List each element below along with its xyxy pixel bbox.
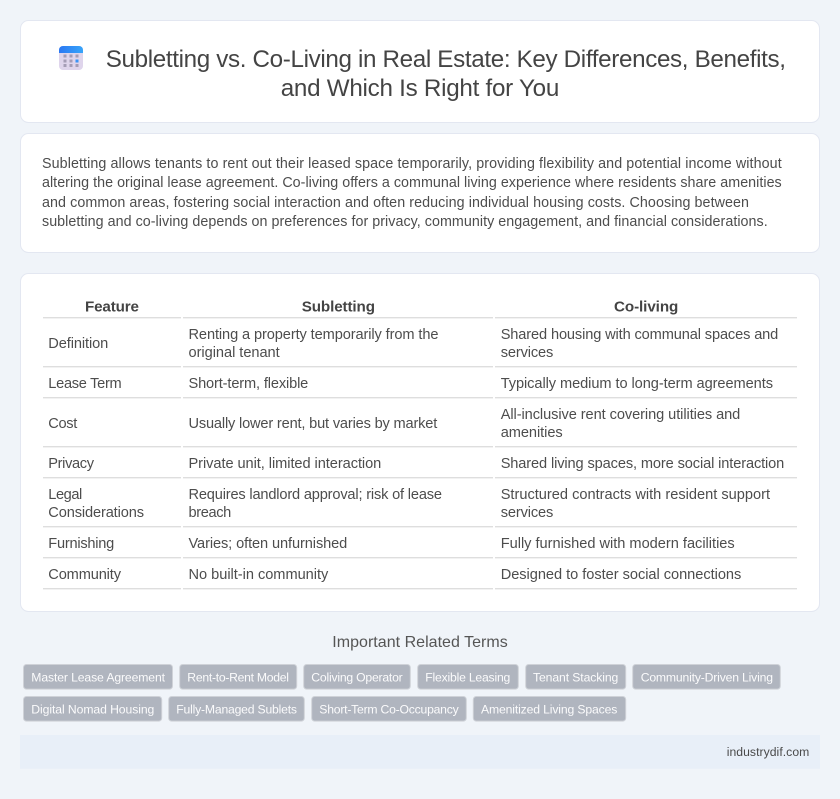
tag (169, 696, 304, 721)
row: cost: All-inclusive rent covering utilities and (501, 407, 740, 423)
row: community: No built-in community (188, 567, 329, 583)
row: legal considerations (48, 487, 770, 521)
row: lease term: Typically medium to long-term agreements (501, 376, 773, 392)
row: lease term: Short-term, flexible (188, 376, 308, 392)
row: definition: original tenant (188, 345, 280, 361)
row: privacy: Privacy (48, 456, 95, 472)
row: legal considerations: Structured contracts with resident support (501, 487, 770, 503)
title (106, 46, 786, 102)
row: privacy (48, 456, 784, 472)
tag: Tenant Stacking (533, 670, 618, 684)
row: definition: Definition (48, 336, 108, 352)
panel: description (20, 134, 820, 252)
row: community: Designed to foster social connections (501, 567, 741, 583)
row: community: Community (48, 567, 122, 583)
row: legal considerations: Considerations (48, 505, 144, 521)
row: cost: Cost (48, 416, 77, 432)
footer (20, 735, 820, 769)
row: furnishing: Fully furnished with modern facilities (501, 536, 735, 552)
tag (304, 664, 410, 689)
row: community (48, 567, 741, 583)
row: furnishing (48, 536, 735, 552)
text block: description: Subletting allows tenants to rent out their leased space temporarily, providing flexibility and potential income without (42, 156, 782, 172)
heading: related terms: Important Related Terms (332, 634, 508, 651)
row: legal considerations: Legal (48, 487, 82, 503)
tag: Coliving Operator (311, 670, 403, 684)
text block: description (42, 156, 782, 230)
row: furnishing: Varies; often unfurnished (188, 536, 347, 552)
tag: Rent-to-Rent Model (187, 670, 289, 684)
tag (24, 696, 162, 721)
row: legal considerations: services (501, 505, 553, 521)
text block: description: subletting and co-living depends on preferences for privacy, community engagement, and financial considerations. (42, 214, 768, 230)
row: privacy: Private unit, limited interaction (188, 456, 381, 472)
tag: Master Lease Agreement (31, 670, 166, 684)
row: lease term: Lease Term (48, 376, 122, 392)
footer: industrydif.com (727, 745, 809, 759)
tag (526, 664, 626, 689)
tag (24, 664, 172, 689)
text block: description: and common areas, fostering social interaction and often reducing individual housing costs. Choosing between (42, 195, 749, 211)
row: cost: amenities (501, 425, 563, 441)
tag (633, 664, 780, 689)
row: legal considerations: breach (188, 505, 231, 521)
row: definition: Shared housing with communal spaces and (501, 327, 778, 343)
tags: related terms (24, 664, 780, 721)
tag (473, 696, 626, 721)
tag (180, 664, 297, 689)
row: cost (48, 407, 740, 441)
row: legal considerations: Requires landlord approval; risk of lease (188, 487, 442, 503)
tag: Community-Driven Living (641, 670, 773, 684)
panel: comparison table (20, 274, 820, 612)
row: definition (48, 327, 778, 361)
title: Subletting vs. Co-Living in Real Estate: Key Differences, Benefits, (106, 46, 786, 73)
table header (85, 298, 678, 316)
row: definition: Renting a property temporarily from the (188, 327, 438, 343)
row: privacy: Shared living spaces, more social interaction (501, 456, 784, 472)
row: lease term (48, 376, 773, 392)
table header: Co-living (614, 298, 678, 316)
row: furnishing: Furnishing (48, 536, 114, 552)
tag (418, 664, 518, 689)
tag: Short-Term Co-Occupancy (319, 702, 460, 716)
row: cost: Usually lower rent, but varies by market (188, 416, 437, 432)
row: definition: services (501, 345, 553, 361)
panel: header (20, 20, 820, 122)
tag (312, 696, 466, 721)
title: and Which Is Right for You (281, 75, 559, 102)
table header: Feature (85, 298, 139, 316)
table header: Subletting (302, 298, 375, 316)
text block: description: altering the original lease agreement. Co-living offers a communal living experience where residents share amenities (42, 175, 782, 191)
tag: Fully-Managed Sublets (176, 702, 297, 716)
tag: Amenitized Living Spaces (481, 702, 617, 716)
icon: calendar (59, 46, 83, 70)
tag: Flexible Leasing (425, 670, 510, 684)
tag: Digital Nomad Housing (31, 702, 154, 716)
